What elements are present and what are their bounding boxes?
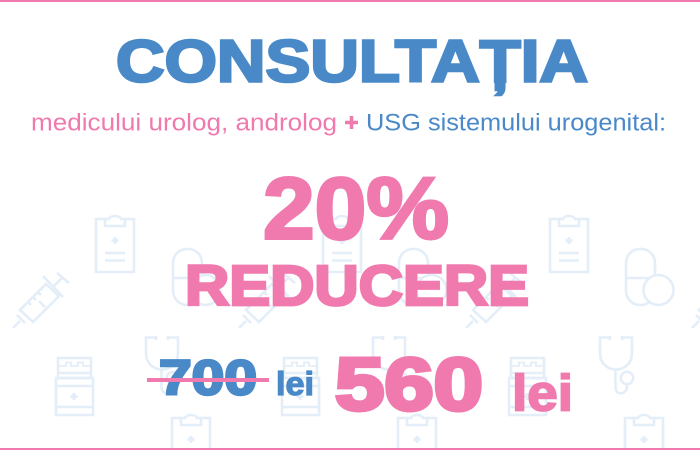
discount label: REDUCERE (185, 254, 529, 318)
old price number: 700 (159, 352, 257, 406)
strikethrough (147, 378, 269, 382)
top border (0, 0, 700, 2)
new price (335, 343, 573, 426)
new price number: 560 (335, 343, 483, 426)
title: CONSULTAȚIA (116, 28, 588, 94)
subtitle (31, 110, 666, 136)
bottom border (0, 448, 700, 450)
background medical icon pattern (13, 216, 700, 450)
subtitle: pink part: medicului urolog, androlog (31, 110, 337, 136)
subtitle: blue part: USG sistemului urogenital: (366, 110, 666, 136)
old price (147, 352, 314, 406)
new price unit: lei (512, 364, 573, 422)
discount percentage: 20% (263, 160, 449, 258)
plus sign (345, 116, 358, 129)
old price unit: lei (276, 365, 314, 402)
